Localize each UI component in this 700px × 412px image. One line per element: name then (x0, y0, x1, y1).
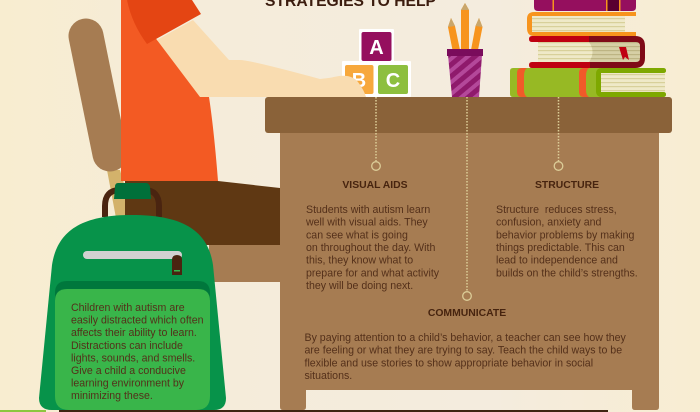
torso (121, 0, 218, 181)
communicate text: By paying attention to a child’s behavior, a teacher can see how they (304, 332, 627, 344)
chair (86, 36, 284, 282)
communicate text (304, 332, 627, 382)
dotted connector: visual aids (372, 97, 380, 170)
structure text: Structure reduces stress, (496, 204, 617, 216)
backpack text: easily distracted which often (71, 315, 204, 327)
structure heading: STRUCTURE (535, 180, 599, 191)
dotted connector: communicate (463, 97, 471, 300)
pocket flap (55, 281, 210, 300)
dotted connector: structure (554, 97, 563, 170)
alphabet blocks (330, 29, 411, 97)
backpack text: Distractions can include (71, 340, 183, 352)
desk (265, 97, 672, 410)
pocket (55, 289, 210, 410)
visual aids text: on throughout the day. With (306, 242, 435, 254)
floor strip (0, 410, 608, 412)
alphabet blocks: B (352, 70, 366, 92)
communicate text: situations. (304, 370, 352, 382)
pencils (461, 3, 469, 50)
communicate heading: COMMUNICATE (428, 308, 506, 319)
visual aids text (305, 204, 440, 292)
visual aids text: can see what is going (306, 229, 408, 241)
handle (105, 190, 159, 217)
alphabet blocks: C (386, 70, 400, 92)
arm (157, 20, 366, 97)
backpack text: minimizing these. (71, 390, 153, 402)
backpack (39, 183, 226, 410)
visual aids heading: VISUAL AIDS (342, 180, 408, 191)
sleeve (127, 0, 201, 44)
legs (125, 181, 280, 245)
backpack text: affects their ability to learn. (71, 327, 197, 339)
clasp (114, 183, 151, 199)
visual aids text: prepare for and what activity (306, 267, 440, 279)
structure text: confusion, anxiety and (496, 217, 602, 229)
student figure (121, 0, 366, 245)
visual aids text: Students with autism learn (306, 204, 430, 216)
body (39, 215, 226, 410)
communicate text: are feeling or what they are trying to say. Teach the child ways to be (304, 345, 622, 357)
communicate text: flexible and use stories to show appropriate behavior in social (304, 357, 593, 369)
backpack text: lights, sounds, and smells. (71, 352, 195, 364)
structure text: lead to independence and (496, 255, 618, 267)
orange book (527, 12, 636, 36)
zipper (83, 251, 182, 259)
book stack (510, 0, 666, 97)
alphabet blocks: A (369, 37, 384, 59)
backpack text: learning environment by (71, 378, 185, 390)
pencil cup (447, 3, 483, 97)
red book (538, 42, 640, 62)
hand (330, 76, 366, 97)
structure text (496, 204, 638, 279)
visual aids text: this, they know what to (306, 255, 413, 267)
backpack text: Give a child a conducive (71, 365, 186, 377)
backpack text: Children with autism are (71, 302, 185, 314)
purple book (534, 0, 636, 11)
structure text: things predictable. This can (496, 242, 625, 254)
structure text: behavior problems by making (496, 229, 634, 241)
green book (510, 68, 666, 97)
structure text: builds on the child’s strengths. (496, 267, 638, 279)
visual aids text: well with visual aids. They (305, 217, 428, 229)
zipper pull (172, 255, 182, 275)
backpack text (71, 302, 204, 402)
visual aids text: they will be doing next. (306, 280, 413, 292)
